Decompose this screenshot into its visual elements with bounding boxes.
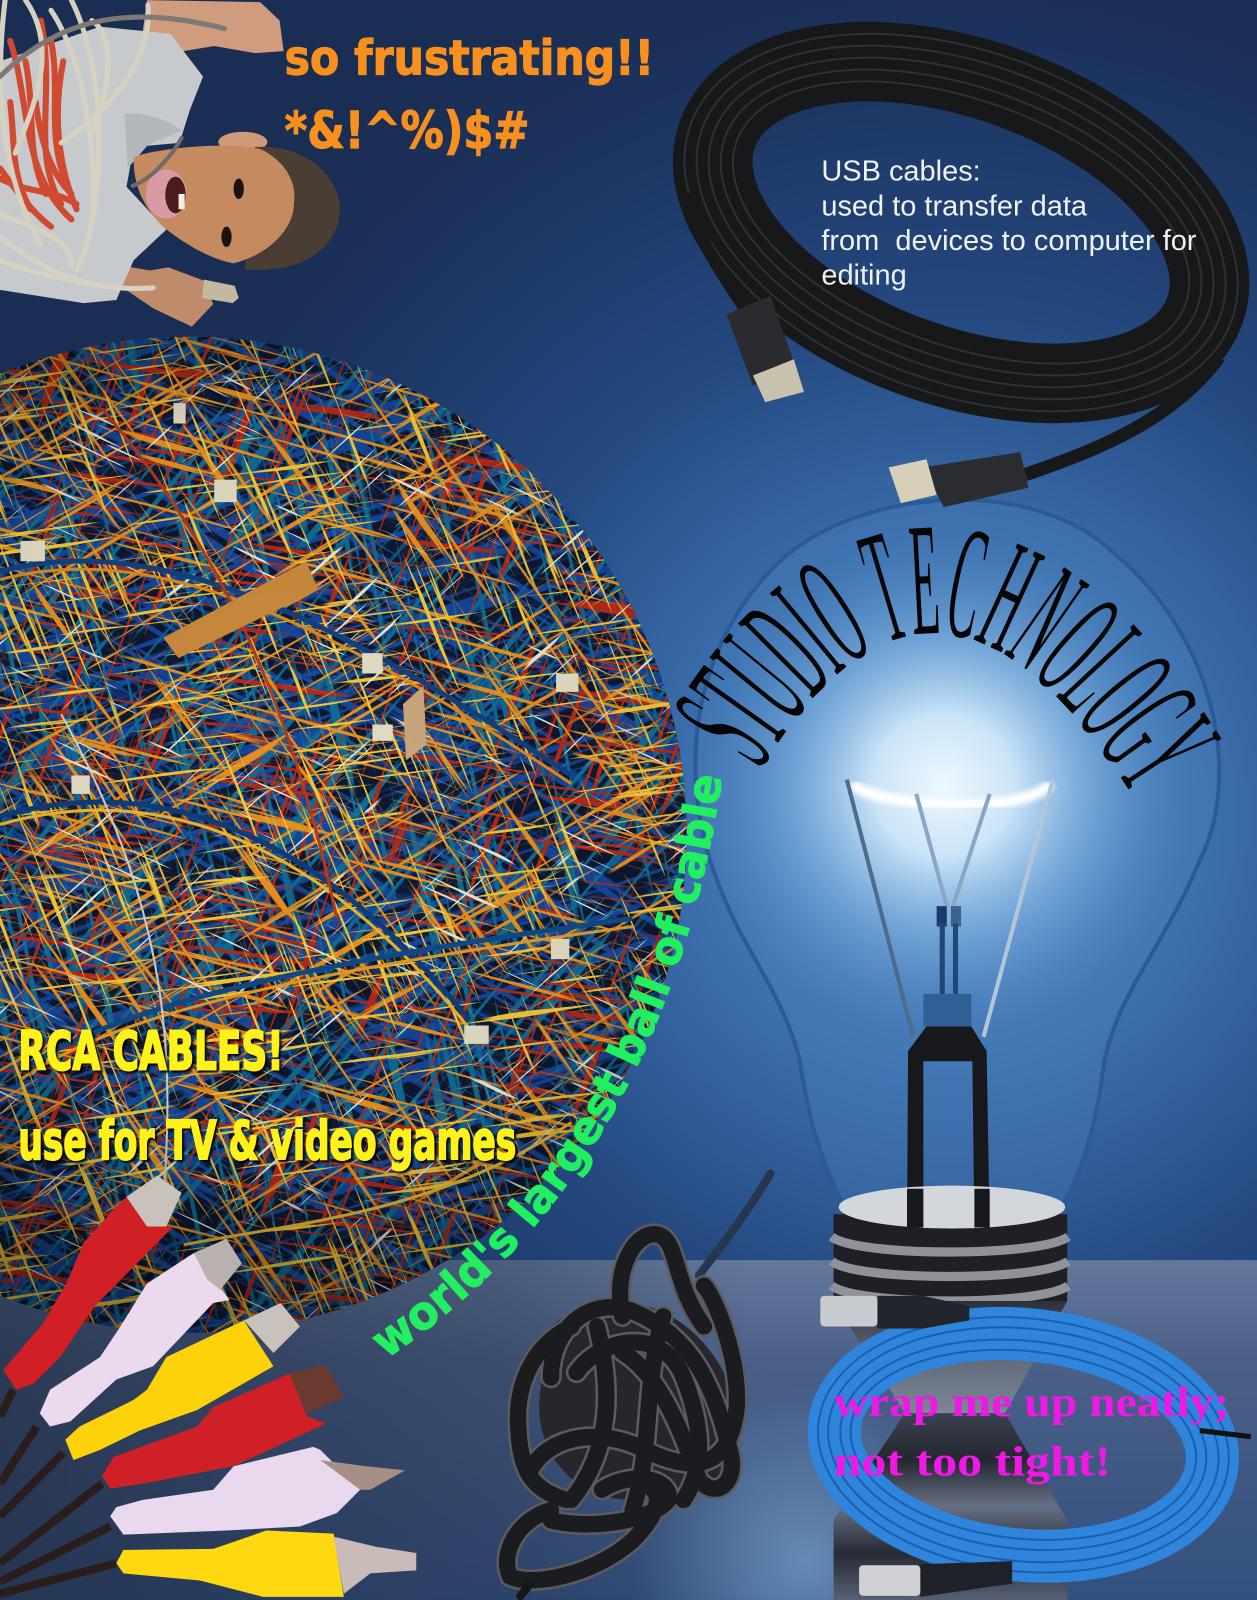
cable tail [520,1584,531,1596]
RCA label: use for TV & video games [18,1110,516,1172]
glass stem [923,906,971,1027]
blue XLR cable [805,1296,1251,1597]
RCA label [18,1020,516,1172]
tangled black cable [507,1173,770,1596]
title: studio technology arch [676,528,1222,790]
RCA label: RCA CABLES! [18,1020,284,1082]
USB label: from devices to computer for [821,225,1197,257]
USB female connector [726,296,796,386]
light bulb [694,500,1219,1600]
curved label: world's largest ball of cable: world's largest ball of cable [372,776,722,1356]
red wire strands [0,337,687,1332]
screw base [832,1186,1068,1600]
open mouth [146,169,187,218]
heading: so frustrating: *&!^%)$# [285,102,530,161]
filament [852,784,1051,805]
shirt [0,27,203,303]
yellow wire strands [0,336,686,1327]
wire bundles [0,408,633,1245]
USB label [821,156,1197,292]
base upper reflection [834,1301,1067,1413]
frustrated boy with cables [0,0,340,327]
orange wire strands [0,336,687,1332]
heading: so frustrating [285,31,654,161]
face [134,146,294,263]
eyes [234,179,244,199]
label: wrap me up neatly: not too tight! [834,1439,1111,1485]
blue coil [805,1297,1242,1592]
stem base [907,1027,990,1228]
collar shading [124,113,182,168]
hair [245,147,340,270]
XLR connector bottom [920,1561,1012,1597]
XLR connector top [877,1296,969,1329]
ear [218,132,267,152]
red plug 2 [102,1373,326,1489]
cable tie [1200,1431,1251,1437]
feed cord [699,1173,770,1275]
white plug 2 [110,1447,360,1535]
ball of cable [0,336,687,1333]
support wires [847,780,1053,1037]
ribbon connectors [20,403,579,1044]
RCA plugs [0,1175,416,1597]
ball shading [0,337,687,1333]
base lower reflection [834,1413,1067,1600]
red plug [3,1197,173,1390]
blue wire strands [0,336,686,1333]
cable core mass [539,1302,738,1501]
white plug [40,1253,230,1426]
bundle of wires [0,0,224,289]
hand top [143,0,284,53]
label: wrap me up neatly: wrap me up neatly; [834,1380,1229,1426]
USB label: used to transfer data [821,190,1088,222]
cable loops outline [507,1234,737,1580]
yellow plug [65,1320,273,1460]
plug [202,280,239,303]
USB cable [632,0,1257,507]
label: wrap me up neatly [834,1380,1229,1485]
USB label: USB cables: [821,156,981,188]
cable coil [632,0,1257,482]
USB male connector [923,452,1028,507]
cable loops core [507,1234,737,1580]
yellow plug 2 [116,1531,344,1597]
arm bottom [0,250,213,327]
bulb glow [694,536,1194,1036]
plug cords [0,1390,116,1594]
cable tails [686,194,753,321]
heading: so frustrating: so frustrating!! [285,31,654,87]
white wire strands [0,344,687,1331]
USB label: editing [821,260,907,292]
bulb glass [695,500,1219,1204]
